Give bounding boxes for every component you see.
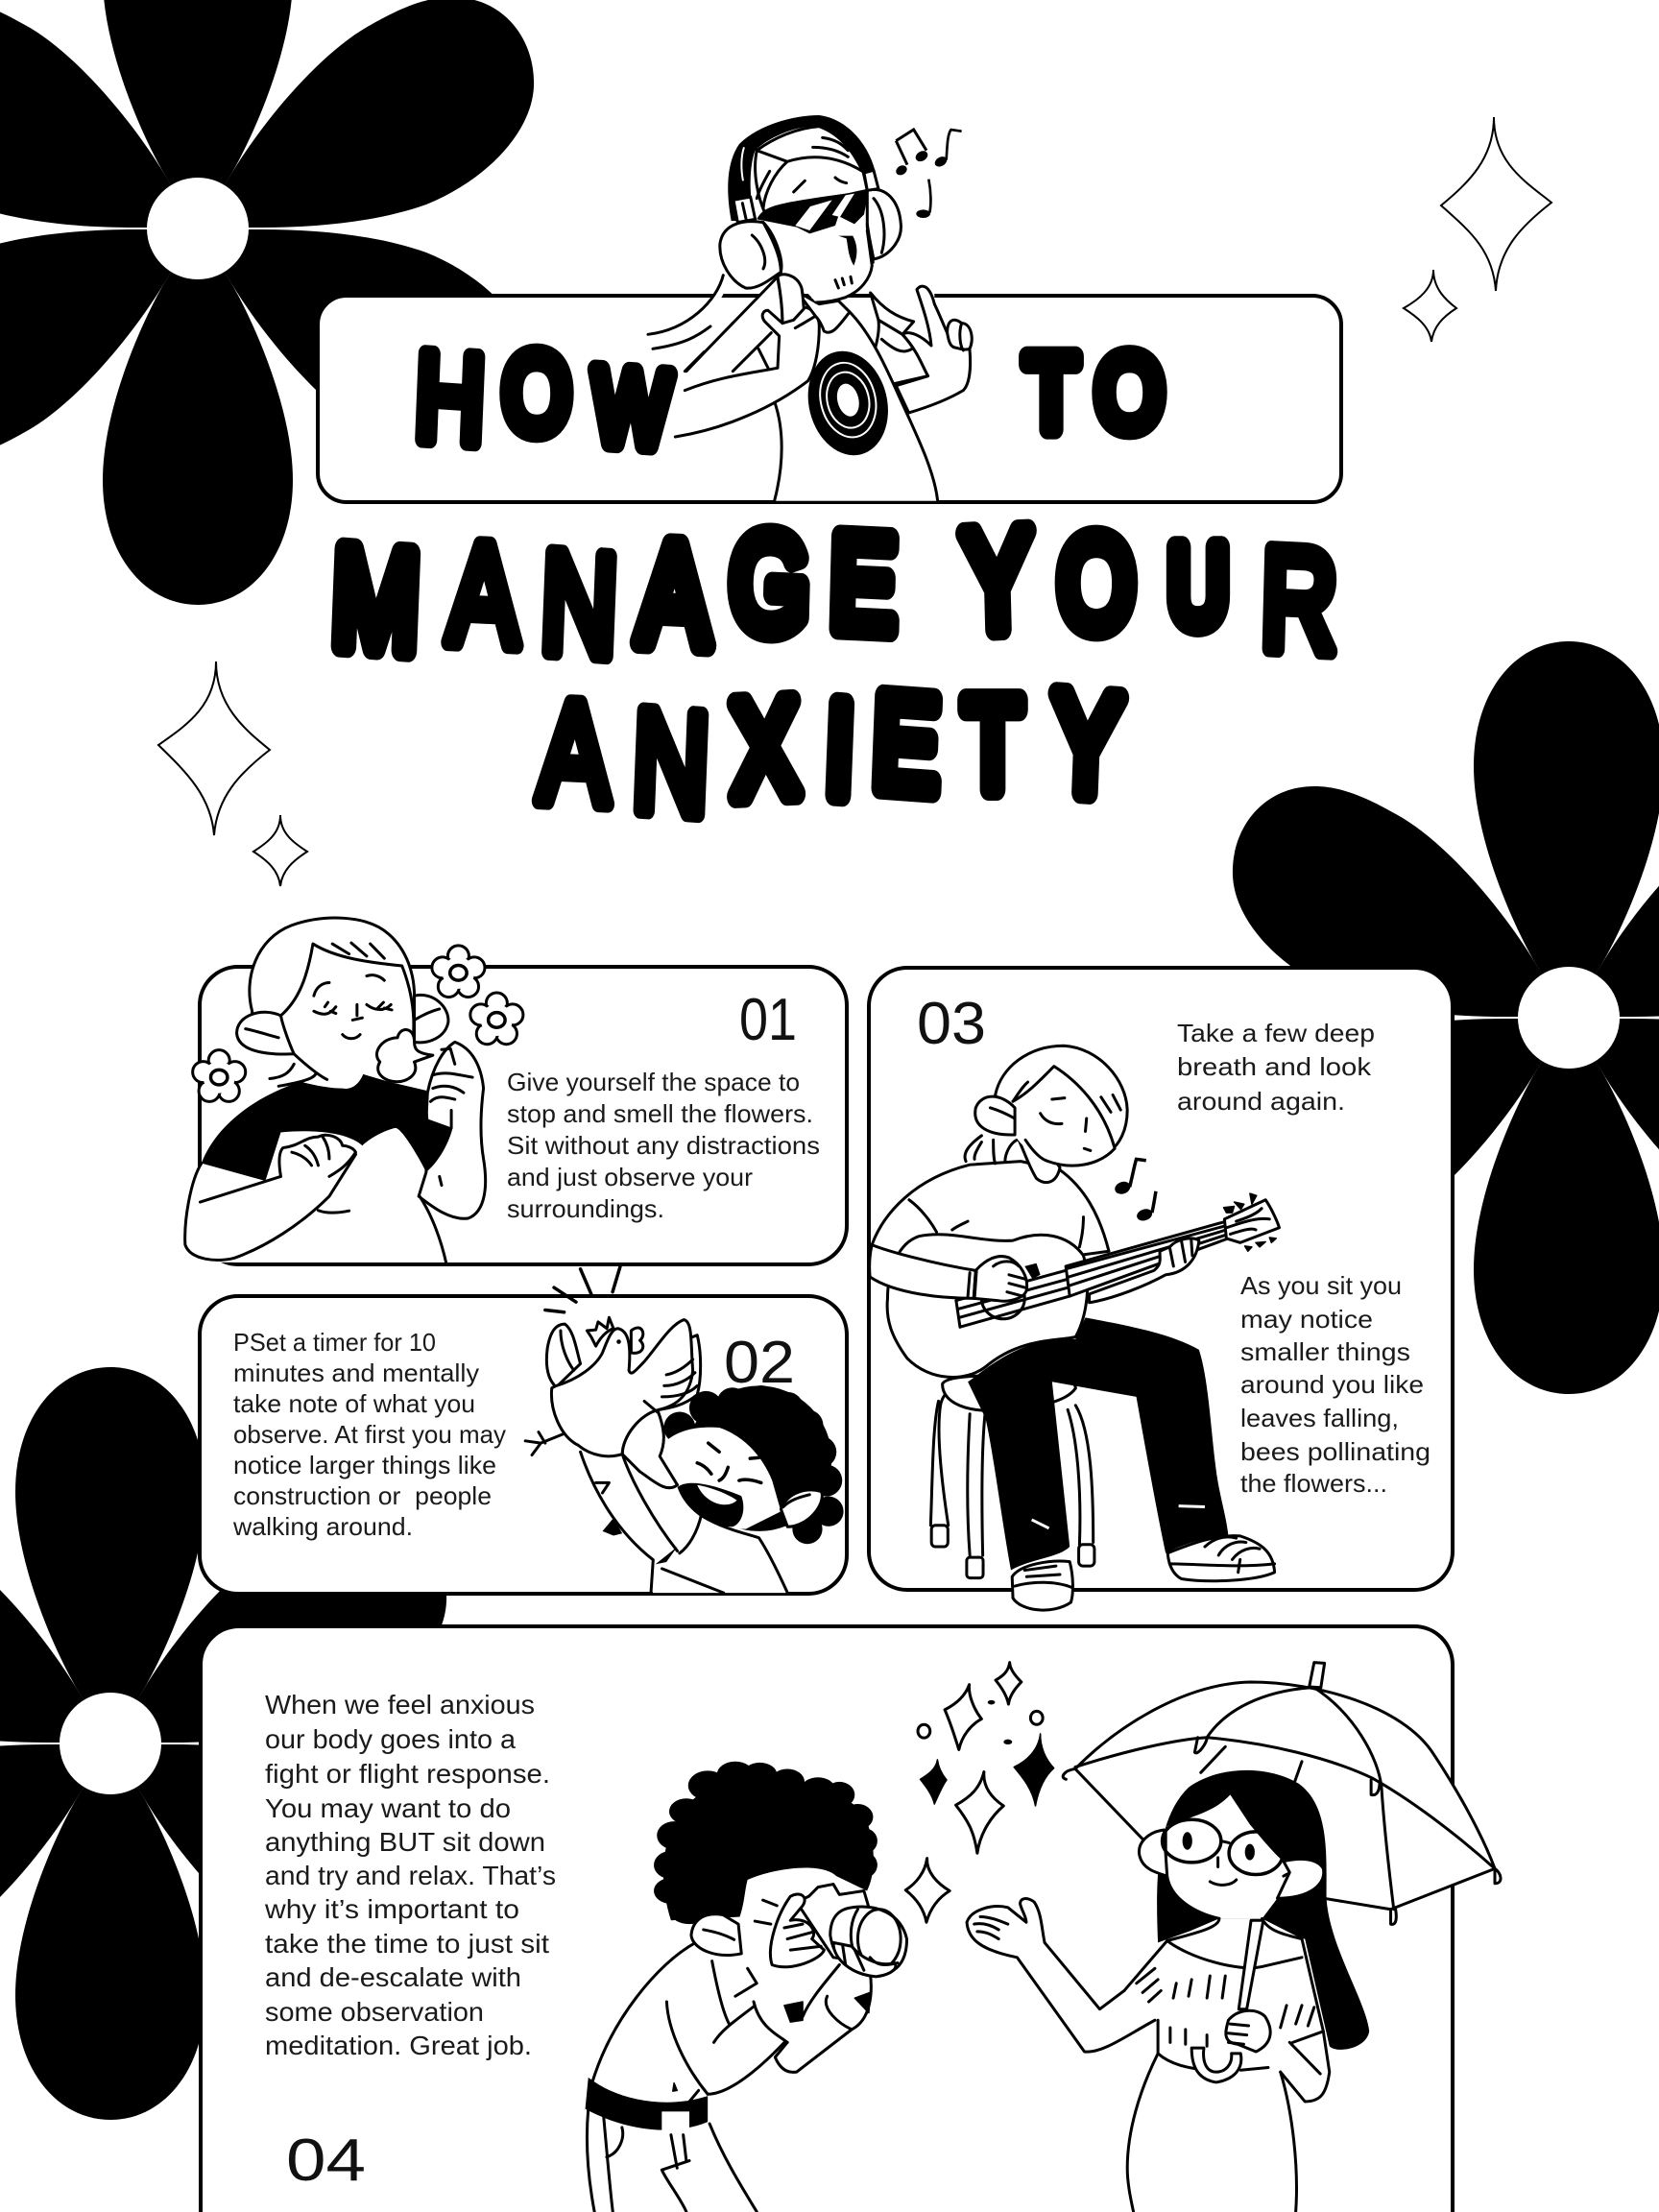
text: step 04: and try and relax. That’s bbox=[265, 1861, 556, 1890]
sparkle: left small bbox=[253, 815, 307, 886]
music notes bbox=[1114, 1159, 1156, 1222]
lens bbox=[830, 1907, 907, 1976]
text: step 04: You may want to do bbox=[265, 1793, 511, 1823]
panel: step 01 bbox=[200, 967, 847, 1264]
cap bbox=[756, 127, 867, 213]
guitar body bbox=[887, 1235, 1088, 1377]
man body bbox=[589, 1942, 784, 2109]
heading: HOW: HO W bbox=[413, 325, 672, 470]
text: step 03 top bbox=[1177, 1019, 1375, 1116]
headstock bbox=[1224, 1200, 1279, 1242]
reaching arm bbox=[967, 1899, 1155, 2052]
flower: top left bbox=[0, 0, 534, 605]
arms and torso bbox=[581, 1452, 787, 1593]
beard and mouth bbox=[678, 1483, 743, 1527]
music notes bbox=[896, 130, 926, 165]
raised forearm and hand bbox=[419, 1042, 486, 1218]
sparkles bbox=[905, 1663, 1054, 1922]
body bbox=[775, 307, 938, 501]
text: step 03 bottom: around you like bbox=[1240, 1370, 1424, 1399]
trousers bbox=[968, 1317, 1228, 1571]
number 04: 04 bbox=[286, 2128, 366, 2194]
panel: step 04 bbox=[201, 1626, 1453, 2212]
black shirt bbox=[202, 1074, 452, 1181]
ear and face lines bbox=[691, 1914, 741, 1955]
text: step 03 top: breath and look bbox=[1177, 1052, 1372, 1081]
text: step 01: and just observe your bbox=[507, 1163, 753, 1191]
illustration: DJ with headphones bbox=[648, 115, 972, 501]
headband bbox=[728, 115, 876, 221]
text: step 01 bbox=[507, 1068, 820, 1223]
text: step 01: stop and smell the flowers. bbox=[507, 1099, 813, 1128]
sparkle: top right small bbox=[1404, 270, 1456, 342]
text: step 03 bottom: may notice bbox=[1240, 1305, 1373, 1334]
text: step 04: When we feel anxious bbox=[265, 1690, 535, 1719]
small flowers bbox=[432, 946, 485, 998]
right hand bbox=[896, 286, 972, 413]
left hand on neck bbox=[1090, 1238, 1199, 1303]
text: step 01: surroundings. bbox=[507, 1194, 664, 1223]
text: step 02: minutes and mentally bbox=[233, 1358, 479, 1387]
illustration: person smelling flowers bbox=[185, 918, 523, 1262]
text: step 03 top: Take a few deep bbox=[1177, 1019, 1375, 1047]
text: step 04: take the time to just sit bbox=[265, 1929, 549, 1959]
text: step 03 bottom: smaller things bbox=[1240, 1337, 1410, 1366]
panel: step 02 bbox=[200, 1296, 847, 1594]
mouth bbox=[838, 236, 856, 266]
girl dress and body bbox=[1124, 1918, 1330, 2102]
stool bbox=[930, 1376, 1094, 1578]
ear bbox=[781, 1490, 822, 1527]
face bbox=[775, 226, 872, 302]
hair bbox=[648, 276, 723, 349]
panel: how to banner bbox=[318, 296, 1341, 502]
sunglasses bbox=[757, 190, 869, 233]
text: step 04: anything BUT sit down bbox=[265, 1827, 545, 1857]
text: step 04: some observation bbox=[265, 1997, 484, 2027]
afro hair bbox=[663, 1385, 844, 1544]
neck and collar bbox=[797, 291, 850, 332]
text: step 03 bottom: leaves falling, bbox=[1240, 1404, 1399, 1432]
heading: MANAGE YOUR bbox=[329, 500, 1339, 687]
strumming arm bbox=[870, 1245, 975, 1298]
text: step 04: fight or flight response. bbox=[265, 1759, 550, 1789]
camera bbox=[797, 1885, 882, 1964]
text: step 02: notice larger things like bbox=[233, 1451, 496, 1479]
text: step 03 bottom bbox=[1240, 1271, 1431, 1498]
heading: MANAGE YOUR: M ANAGE bbox=[329, 504, 898, 687]
text: step 02: take note of what you bbox=[233, 1389, 475, 1418]
left arm bbox=[675, 275, 819, 437]
trousers bbox=[588, 2109, 757, 2212]
panel: step 03 bbox=[869, 968, 1453, 1590]
text: step 03 bottom: bees pollinating bbox=[1240, 1437, 1431, 1466]
belt bbox=[586, 2078, 708, 2130]
text: step 04: why it’s important to bbox=[264, 1894, 519, 1924]
text: step 03 bottom: As you sit you bbox=[1240, 1271, 1402, 1300]
shoes bbox=[1012, 1561, 1072, 1610]
record bbox=[798, 343, 899, 464]
heading: TO: TO bbox=[1024, 334, 1164, 452]
torso bbox=[872, 1162, 1109, 1268]
text: step 04: and de-escalate with bbox=[265, 1962, 521, 1992]
number 03: 03 bbox=[917, 991, 986, 1057]
right cup bbox=[867, 189, 901, 259]
bird bbox=[546, 1324, 581, 1387]
illustration: person with bird bbox=[525, 1266, 844, 1593]
text: step 02 bbox=[232, 1328, 506, 1541]
sparkle: top right large bbox=[1441, 117, 1551, 291]
afro hair bbox=[654, 1762, 878, 1924]
head bbox=[996, 1046, 1127, 1150]
bird feet bbox=[525, 1432, 563, 1455]
illustration: person photographing sparkles bbox=[586, 1663, 1501, 2212]
strings and neck bbox=[1066, 1221, 1228, 1296]
text: step 02: observe. At first you may bbox=[233, 1420, 506, 1449]
text: step 04: our body goes into a bbox=[265, 1724, 517, 1754]
number 01: 01 bbox=[739, 987, 797, 1053]
hand on camera bbox=[770, 1894, 824, 1967]
text: step 03 top: around again. bbox=[1177, 1087, 1345, 1116]
text: step 04: meditation. Great job. bbox=[265, 2031, 532, 2060]
text: step 02: PSet a timer for 10 bbox=[233, 1328, 436, 1357]
text: step 01: Give yourself the space to bbox=[507, 1068, 800, 1096]
motion lines bbox=[545, 1266, 620, 1312]
text: step 04 bbox=[264, 1690, 556, 2060]
number 02: 02 bbox=[724, 1330, 795, 1396]
face bbox=[695, 1867, 867, 1964]
left ear cup bbox=[720, 222, 781, 288]
text: step 02: construction or people bbox=[233, 1481, 492, 1510]
face bbox=[1167, 1794, 1324, 1918]
umbrella bbox=[1063, 1663, 1501, 1924]
finger over face bbox=[778, 275, 804, 324]
long black hair bbox=[1157, 1770, 1369, 2050]
umbrella shaft and hand bbox=[1238, 1920, 1263, 2009]
text: step 03 bottom: the flowers... bbox=[1240, 1469, 1387, 1498]
flower: right bbox=[1233, 641, 1659, 1394]
sparkle: left large bbox=[158, 661, 270, 835]
forearms bbox=[775, 1964, 871, 2072]
heading: MANAGE YOUR: Y O U R bbox=[961, 500, 1339, 683]
heading: ANXIETY: ANX IE T Y bbox=[537, 663, 1124, 846]
flower: bottom left bbox=[0, 1367, 446, 2120]
text: step 02: walking around. bbox=[232, 1512, 413, 1541]
text: step 01: Sit without any distractions bbox=[507, 1131, 820, 1160]
illustration: person playing guitar bbox=[870, 1046, 1279, 1610]
